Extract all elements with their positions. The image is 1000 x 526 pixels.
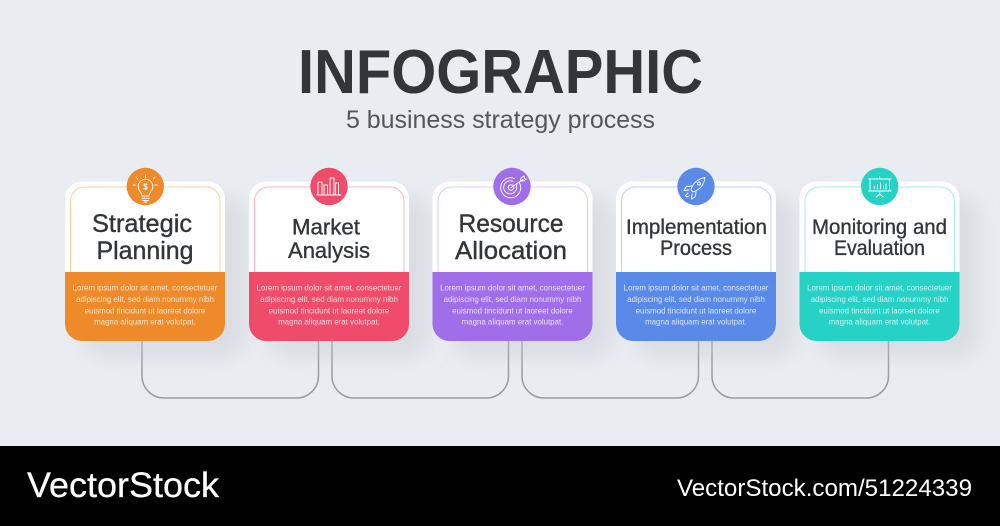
panel: Market Analysis: Analysis <box>288 238 370 263</box>
panel: Resource Allocation <box>432 168 612 357</box>
footer bar <box>0 446 1000 526</box>
description: adipiscing elit, sed diam nonummy nibh <box>444 295 581 304</box>
description: Lorem ipsum dolor sit amet, consectetuer <box>73 284 218 292</box>
description <box>807 284 952 327</box>
heading: Monitoring and <box>812 216 947 239</box>
description: magna aliquam erat volutpat. <box>462 318 563 327</box>
icon: light bulb <box>127 168 164 205</box>
description: euismod tincidunt ut laoreet dolore <box>269 306 390 315</box>
description <box>624 284 769 327</box>
panel: Resource Allocation: Allocation <box>455 237 567 265</box>
connector: step 4 to step 5 <box>712 341 888 398</box>
description: adipiscing elit, sed diam nonummy nibh <box>627 295 765 304</box>
description: Lorem ipsum dolor sit amet, consectetuer <box>807 284 952 292</box>
title: INFOGRAPHIC <box>298 38 703 107</box>
description <box>257 284 402 327</box>
panel: Implementation Process <box>616 168 796 357</box>
description: adipiscing elit, sed diam nonummy nibh <box>811 295 948 304</box>
icon: bar chart <box>310 168 348 205</box>
panel: Implementation Process: Process <box>660 237 732 260</box>
description: magna aliquam erat volutpat. <box>94 318 196 327</box>
footer brand: VectorStock <box>27 466 220 505</box>
description: Lorem ipsum dolor sit amet, consectetuer <box>440 284 585 292</box>
panel: Monitoring and Evaluation: Evaluation <box>834 237 925 260</box>
connector: step 2 to step 3 <box>332 341 508 398</box>
description <box>440 284 585 327</box>
footer image id: VectorStock.com/51224339 <box>677 475 972 502</box>
connector: step 1 to step 2 <box>142 341 318 398</box>
description: Lorem ipsum dolor sit amet, consectetuer <box>257 284 402 292</box>
subtitle: 5 business strategy process <box>346 106 655 134</box>
description: euismod tincidunt ut laoreet dolore <box>85 306 206 315</box>
icon: light bulb: $ <box>143 182 148 192</box>
icon: rocket <box>677 168 715 205</box>
description: adipiscing elit, sed diam nonummy nibh <box>260 295 398 304</box>
description: euismod tincidunt ut laoreet dolore <box>452 306 573 315</box>
heading: Strategic <box>92 210 192 238</box>
panel: Strategic Planning: Planning <box>96 237 194 265</box>
description: euismod tincidunt ut laoreet dolore <box>636 306 757 315</box>
heading: Resource <box>458 210 564 238</box>
description: adipiscing elit, sed diam nonummy nibh <box>76 295 214 304</box>
description: magna aliquam erat volutpat. <box>829 318 930 327</box>
description <box>73 284 218 327</box>
description: magna aliquam erat volutpat. <box>645 318 747 327</box>
description: euismod tincidunt ut laoreet dolore <box>819 306 940 315</box>
icon: target <box>493 168 531 205</box>
icon: presentation board <box>861 168 898 205</box>
heading: Market <box>292 214 360 240</box>
connector: step 3 to step 4 <box>522 341 698 398</box>
description: Lorem ipsum dolor sit amet, consectetuer <box>624 284 769 292</box>
heading: Implementation <box>626 216 767 239</box>
description: magna aliquam erat volutpat. <box>278 318 380 327</box>
panel: Monitoring and Evaluation <box>800 168 980 357</box>
panel: Market Analysis <box>249 168 429 357</box>
panel: Strategic Planning <box>65 168 245 357</box>
